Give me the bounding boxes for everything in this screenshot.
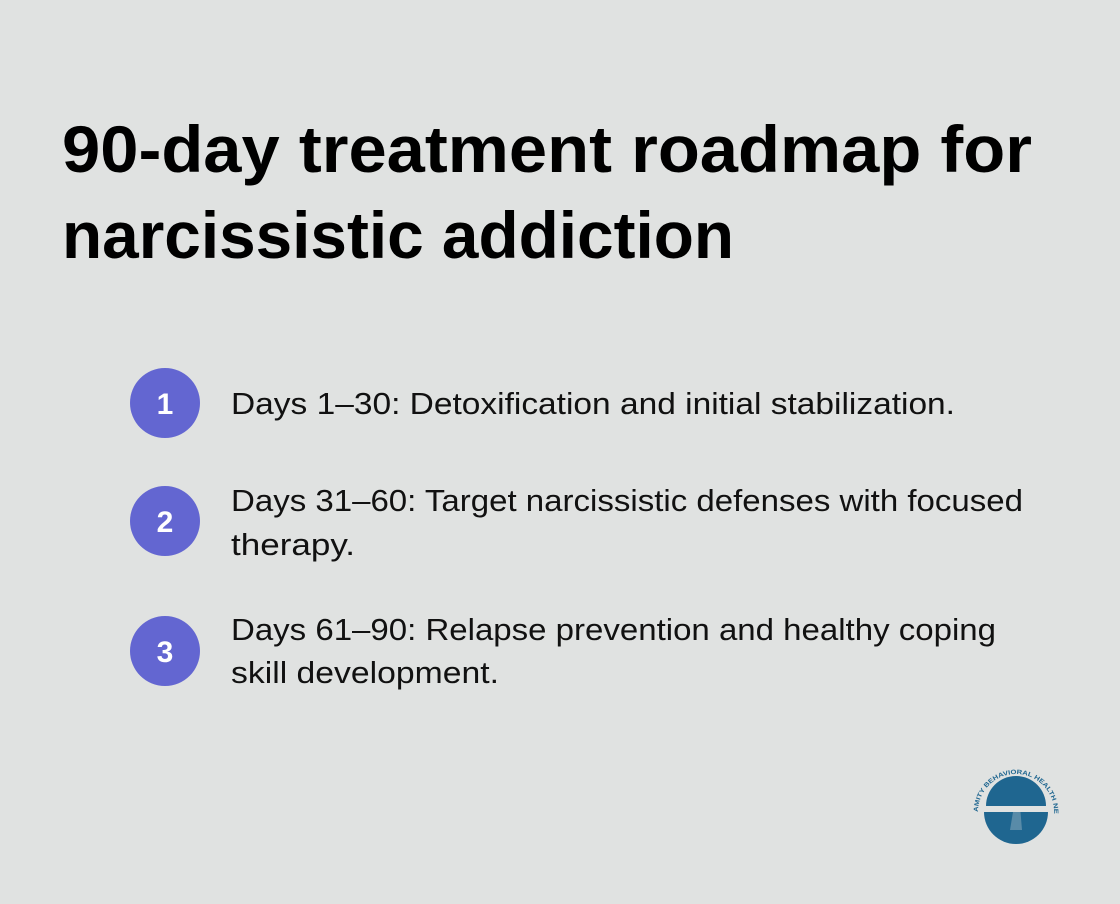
step 2 text: therapy.	[231, 527, 355, 562]
step 1 text: Days 1–30: Detoxification and initial stabilization.	[231, 386, 955, 421]
title	[62, 112, 1032, 272]
step 3 text	[231, 612, 996, 690]
step 2 text	[231, 483, 1023, 562]
step 3 text: skill development.	[231, 655, 499, 690]
step 3 text: Days 61–90: Relapse prevention and healthy coping	[231, 612, 996, 647]
step 2	[130, 483, 1023, 562]
step 1	[130, 368, 955, 438]
title: 90-day treatment roadmap for	[62, 112, 1032, 186]
badge 1	[130, 368, 200, 438]
badge 3: 3	[157, 636, 173, 669]
badge 2	[130, 486, 200, 556]
step 2 text: Days 31–60: Target narcissistic defenses with focused	[231, 483, 1023, 518]
step 3	[130, 612, 996, 690]
logo: AMITY BEHAVIORAL HEALTH NETWORK	[974, 770, 1058, 814]
badge 2: 2	[157, 506, 173, 539]
badge 3	[130, 616, 200, 686]
badge 1: 1	[157, 388, 173, 421]
title: narcissistic addiction	[62, 198, 734, 272]
